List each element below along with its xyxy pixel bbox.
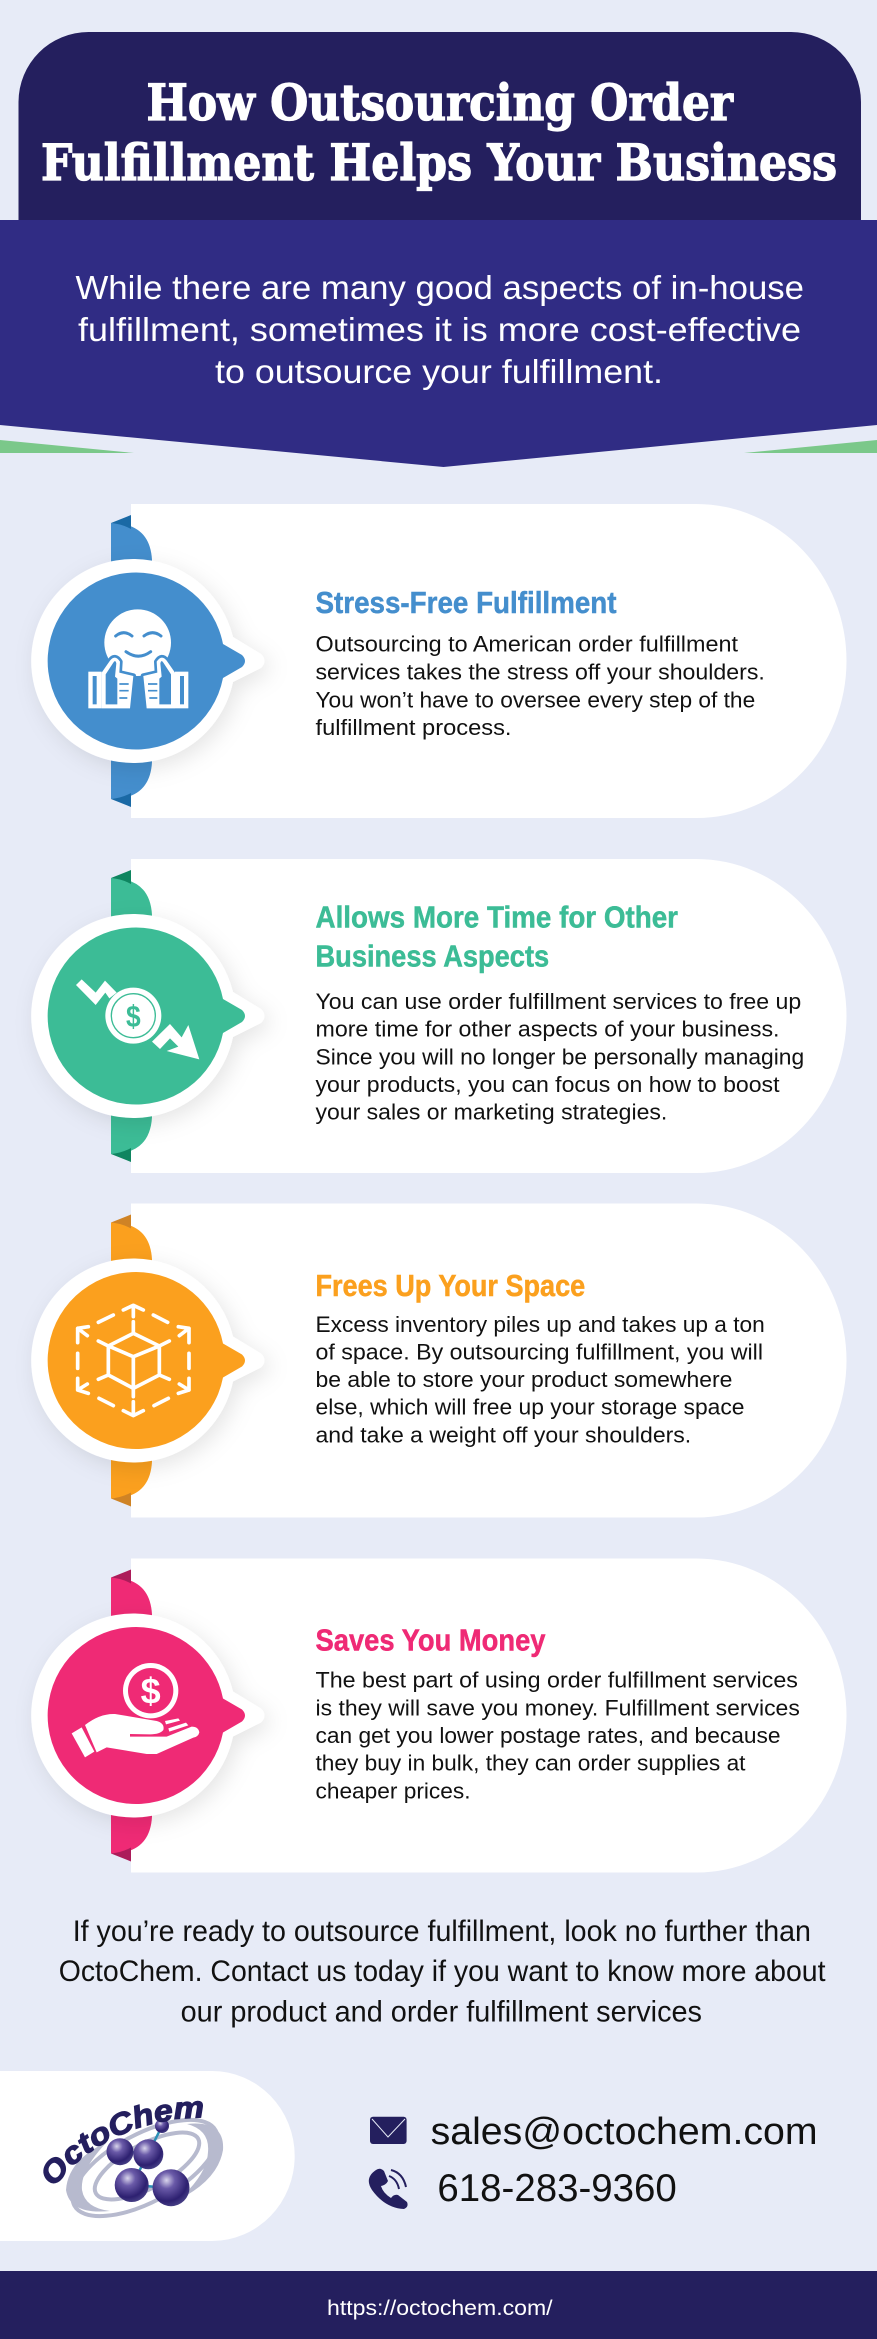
body text: be able to store your product somewhere [316,1367,732,1392]
icon: phone [369,2169,408,2209]
icon: smiley with thumbs up [88,609,188,708]
card background [131,1204,846,1518]
body text: can get you lower postage rates, and because [316,1723,780,1748]
body text: cheaper prices. [316,1778,470,1803]
website url: https://octochem.com/ [327,2297,553,2320]
icon: coin with falling arrow [76,979,199,1059]
intro text [76,270,804,391]
body text [316,989,804,1125]
card background [131,1558,846,1872]
title: How Outsourcing Order [146,73,734,132]
ribbon [111,515,152,807]
body text [316,1312,765,1447]
body text: of space. By outsourcing fulfillment, you will [316,1339,763,1364]
footer bar [0,2271,877,2339]
icon badge [31,914,265,1118]
body text: You can use order fulfillment services to free up [316,989,801,1014]
panel: Stress-Free Fulfillment [31,504,846,818]
body text: services takes the stress off your shoulders. [316,659,765,684]
body text: is they will save you money. Fulfillment services [316,1695,800,1720]
icon badge [31,1613,265,1817]
email address: sales@octochem.com [431,2111,818,2153]
panel: Saves You Money [31,1558,846,1872]
body text: Since you will no longer be personally managing [316,1044,804,1069]
title [41,73,837,192]
call to action text: If you’re ready to outsource fulfillment, look no further than [73,1915,811,1948]
heading [316,899,678,974]
panel: Frees Up Your Space [31,1204,846,1518]
body text: more time for other aspects of your business. [316,1017,780,1042]
intro text: to outsource your fulfillment. [215,354,663,391]
body text: they buy in bulk, they can order supplies at [316,1751,746,1776]
heading: Allows More Time for Other [316,899,678,934]
intro text: fulfillment, sometimes it is more cost-effective [78,312,801,349]
ribbon [111,870,152,1162]
icon badge [31,1258,265,1462]
logo: OctoChem [43,2100,224,2218]
ribbon [111,1214,152,1506]
heading: Business Aspects [316,939,549,974]
logo: OctoChem: OctoChem [43,2100,203,2184]
logo panel [0,2071,295,2241]
card background [131,859,846,1173]
body text: The best part of using order fulfillment services [316,1668,798,1693]
icon: hand holding coin [72,1663,199,1757]
call to action text: OctoChem. Contact us today if you want to know more about [59,1955,825,1988]
panel: Allows More Time [31,859,846,1173]
body text: fulfillment process. [316,715,512,740]
icon: cube with expanding arrows [78,1305,189,1416]
ribbon [111,1570,152,1862]
body text: You won’t have to oversee every step of the [316,687,755,712]
body text: and take a weight off your shoulders. [316,1422,691,1447]
body text: your sales or marketing strategies. [316,1100,667,1125]
body text: your products, you can focus on how to boost [316,1072,780,1097]
heading: Saves You Money [316,1623,546,1658]
phone number: 618-283-9360 [437,2167,677,2210]
icon: coin with falling arrow: $ [126,1000,141,1034]
body text [316,1668,800,1803]
body text: Excess inventory piles up and takes up a ton [316,1312,765,1337]
intro text: While there are many good aspects of in-house [76,270,804,307]
call to action text: our product and order fulfillment services [181,1996,702,2029]
card background [131,504,846,818]
body text: Outsourcing to American order fulfillment [316,632,739,657]
icon: envelope [370,2117,407,2144]
intro banner [0,220,877,467]
body text [316,632,765,740]
decorative green wedge left [0,440,134,453]
call to action text [59,1915,825,2029]
decorative green wedge right [744,440,877,453]
icon badge [31,559,265,763]
heading: Stress-Free Fulfillment [316,585,616,620]
heading: Frees Up Your Space [316,1268,585,1303]
body text: else, which will free up your storage space [316,1395,744,1420]
icon: hand holding coin: $ [141,1671,161,1712]
title panel [18,32,861,220]
